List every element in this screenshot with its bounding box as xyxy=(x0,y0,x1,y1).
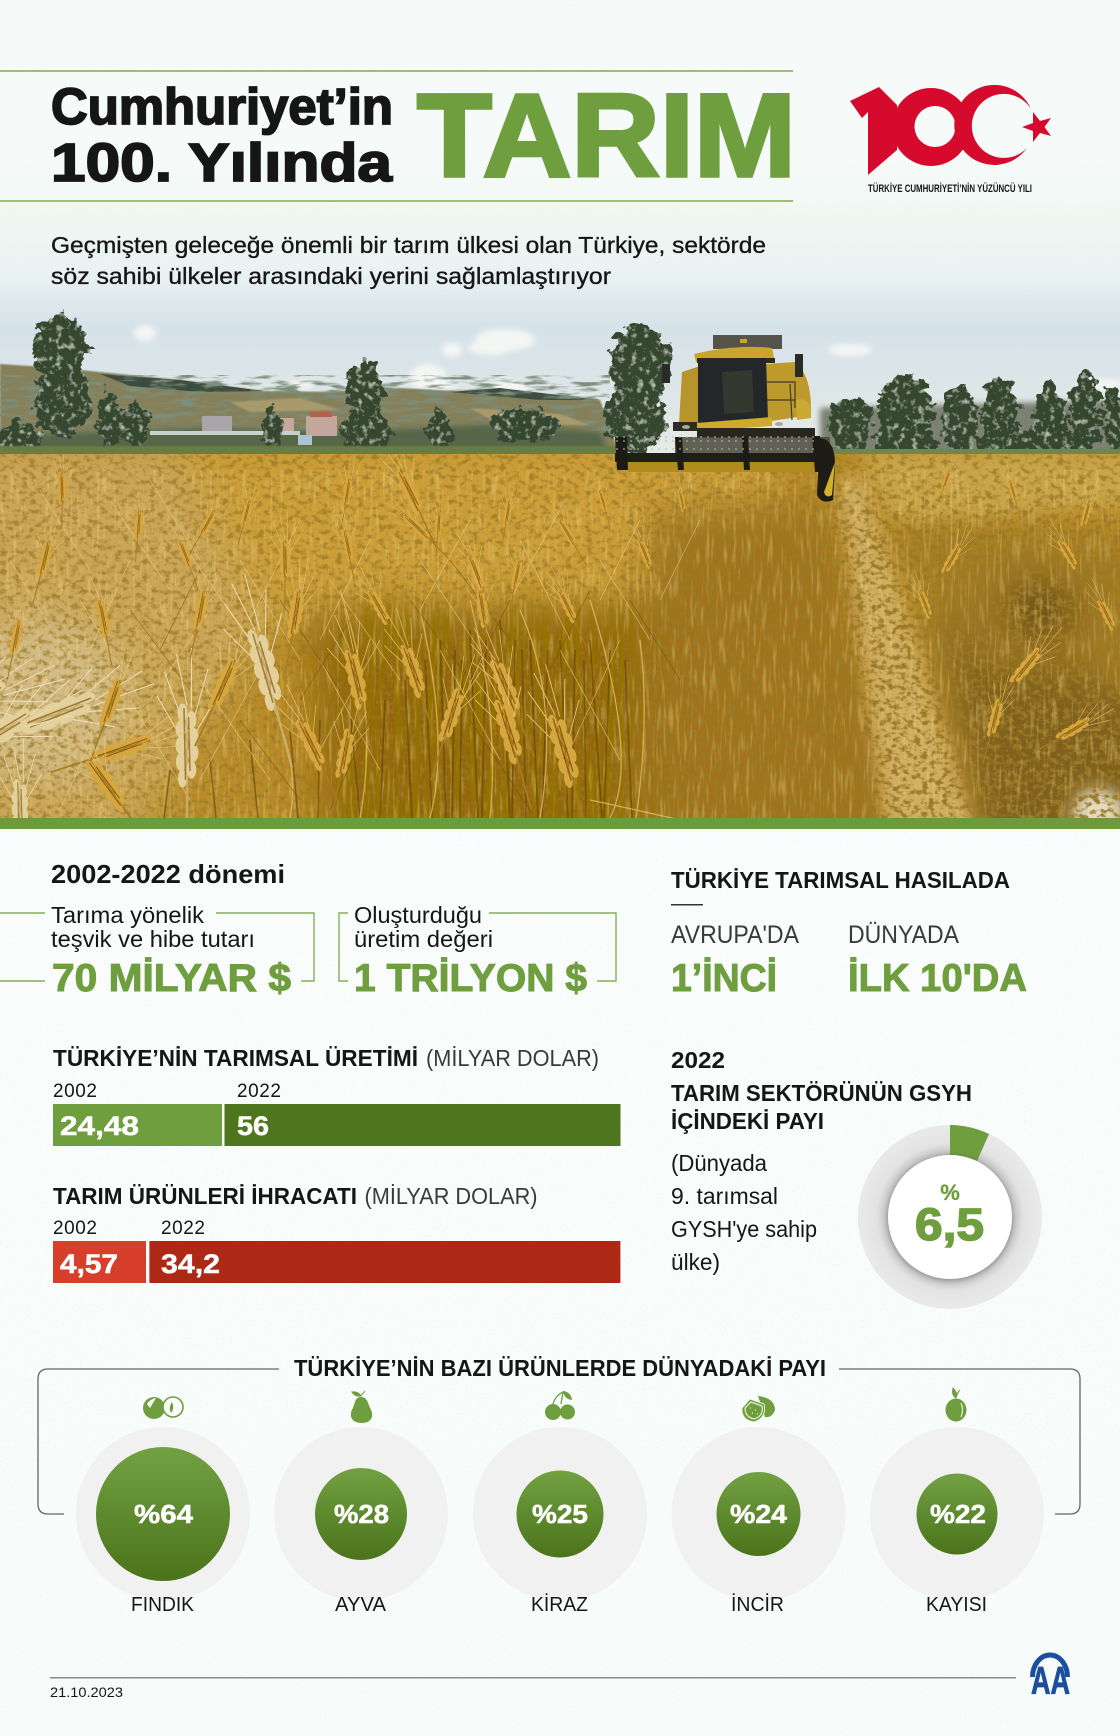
panel: tarımsal hasıla xyxy=(671,867,1027,1000)
panel: 2002-2022 dönemi: teşvik ve hibe tutarı xyxy=(51,926,255,952)
logo: Anadolu Ajansı: AA xyxy=(1031,1660,1070,1703)
item: fındık: FINDIK xyxy=(131,1594,195,1616)
field colour masses xyxy=(0,454,1120,818)
headlamps xyxy=(682,425,690,429)
heading: TARIM ÜRÜNLERİ İHRACATI xyxy=(53,1183,357,1209)
title: Cumhuriyet'in: Cumhuriyet’in xyxy=(51,78,393,135)
field base xyxy=(0,454,1120,818)
green divider bar xyxy=(0,818,1120,829)
item: kiraz: %25 xyxy=(532,1499,588,1529)
hills xyxy=(0,364,1120,456)
value: 70 milyar: 70 MİLYAR $ xyxy=(52,957,291,1000)
bar 2022 xyxy=(224,1104,620,1146)
item: kayısı: KAYISI xyxy=(926,1594,987,1616)
donut chart 6,5: 6,5 xyxy=(915,1199,984,1250)
item: kiraz: KİRAZ xyxy=(531,1593,588,1616)
header: title block xyxy=(0,70,796,202)
grass band xyxy=(0,446,620,455)
subtitle: Geçmişten geleceğe önemli bir tarım ülkesi olan Türkiye, sektörde xyxy=(51,232,766,258)
item: incir: %24 xyxy=(730,1499,788,1529)
donut chart 6,5: % xyxy=(940,1180,960,1205)
panel: GSYH payı: GYSH'ye sahip xyxy=(671,1216,817,1242)
windscreen xyxy=(698,358,768,425)
item: fındık: %64 xyxy=(134,1499,194,1529)
bar chart: tarımsal üretim: 56 xyxy=(237,1111,269,1141)
title: 100. Yılında: 100. Yılında xyxy=(51,133,393,193)
bracket xyxy=(38,1369,1080,1514)
bar chart: tarımsal üretim xyxy=(53,1045,620,1146)
heading: TÜRKİYE’NİN TARIMSAL ÜRETİMİ xyxy=(53,1045,418,1071)
bar chart: tarımsal üretim: 2022 xyxy=(237,1081,281,1102)
photo: wheat field and combine harvester xyxy=(0,296,1120,829)
item: ayva xyxy=(274,1391,448,1616)
label: üretim değeri: Oluşturduğu xyxy=(354,902,482,928)
icon: cherries xyxy=(545,1391,575,1420)
heading: 2002-2022 dönemi xyxy=(51,859,285,889)
wheat stalks xyxy=(164,620,632,818)
date: 21.10.2023 xyxy=(50,1684,123,1700)
header rails xyxy=(675,437,830,454)
logo: Anadolu Ajansı xyxy=(1031,1655,1070,1703)
panel: 2002-2022 dönemi: üretim değeri xyxy=(354,926,493,952)
footer xyxy=(50,1655,1070,1703)
panel: GSYH payı xyxy=(671,1047,1042,1309)
ladder xyxy=(767,382,795,420)
title rule bottom xyxy=(0,200,793,202)
panel: 2002-2022 dönemi xyxy=(0,859,616,1000)
heading: 2022 xyxy=(671,1047,725,1073)
mirrors xyxy=(662,364,670,383)
item: kiraz xyxy=(473,1391,647,1616)
bar 2002 xyxy=(53,1241,146,1283)
icon: fig xyxy=(742,1396,775,1422)
panel: tarımsal hasıla: İLK 10'DA xyxy=(848,957,1027,1000)
panel: ürünlerde dünyadaki pay xyxy=(38,1355,1080,1616)
yellow cab rim xyxy=(696,417,772,431)
bar chart: ihracat xyxy=(53,1183,620,1283)
fine awns xyxy=(10,480,700,810)
field xyxy=(0,454,1120,818)
item: ayva: %28 xyxy=(334,1499,389,1529)
bar chart: ihracat: 34,2 xyxy=(161,1249,220,1279)
bar chart: tarımsal üretim: (MİLYAR DOLAR) xyxy=(426,1045,599,1071)
bar chart: ihracat: (MİLYAR DOLAR) xyxy=(364,1183,538,1209)
value: 1 trilyon: 1 TRİLYON $ xyxy=(354,957,587,1000)
trees xyxy=(0,314,1120,456)
title rule top xyxy=(0,70,793,72)
logo: Türkiye Cumhuriyeti 100. yıl: TÜRKİYE CUMHURİYETİ’NİN YÜZÜNCÜ YILI xyxy=(868,182,1032,195)
Avrupa: AVRUPA'DA xyxy=(671,921,799,949)
panel: GSYH payı: TARIM SEKTÖRÜNÜN GSYH xyxy=(671,1080,972,1106)
note: (Dünyada xyxy=(671,1150,767,1176)
Dünya: DÜNYADA xyxy=(848,921,959,949)
bracket: üretim değeri xyxy=(339,913,616,981)
icon: apricot xyxy=(946,1388,966,1422)
panel: GSYH payı: İÇİNDEKİ PAYI xyxy=(671,1108,824,1134)
bar chart: ihracat: 2022 xyxy=(161,1218,205,1239)
buildings xyxy=(150,412,337,445)
title: TARIM: TARIM xyxy=(417,70,796,202)
side panels xyxy=(679,366,700,424)
heading: TÜRKİYE’NİN BAZI ÜRÜNLERDE DÜNYADAKİ PAYI xyxy=(294,1355,826,1381)
bracket: teşvik xyxy=(0,913,314,981)
heading: TÜRKİYE TARIMSAL HASILADA xyxy=(671,867,1010,893)
donut chart 6,5 xyxy=(858,1125,1042,1309)
panel: tarımsal hasıla: 1’İNCİ xyxy=(671,957,777,1000)
subtitle xyxy=(51,232,766,289)
item: ayva: AYVA xyxy=(335,1594,387,1616)
label: teşvik ve hibe: Tarıma yönelik xyxy=(51,902,205,928)
footer rule xyxy=(50,1677,1016,1678)
cab roof xyxy=(694,347,775,362)
field textures xyxy=(0,454,1120,818)
wheat ears: mid and far xyxy=(0,431,1120,768)
side tank xyxy=(796,399,811,420)
clouds xyxy=(134,325,1120,394)
years: 2002 xyxy=(53,1081,97,1102)
item: incir xyxy=(672,1396,846,1616)
item: kayısı: %22 xyxy=(930,1499,986,1529)
panel: GSYH payı: ülke) xyxy=(671,1249,720,1275)
side wheel and divider xyxy=(817,438,835,502)
subtitle: söz sahibi ülkeler arasındaki yerini sağlamlaştırıyor xyxy=(51,263,611,289)
item: fındık xyxy=(76,1397,250,1616)
bar 2002 xyxy=(53,1104,222,1146)
item: incir: İNCİR xyxy=(731,1593,784,1616)
wheat ears: near xyxy=(0,553,614,884)
years: 2002 xyxy=(53,1218,97,1239)
values: 4,57 xyxy=(60,1249,118,1279)
logo: Türkiye Cumhuriyeti 100. yıl xyxy=(850,85,1051,195)
icon: hazelnut xyxy=(143,1397,183,1419)
item: kayısı xyxy=(870,1388,1044,1616)
values: 24,48 xyxy=(60,1111,139,1141)
bar 2022 xyxy=(149,1241,620,1283)
combine harvester xyxy=(615,335,835,502)
icon: quince xyxy=(351,1391,372,1423)
grain tank xyxy=(713,335,782,349)
sky xyxy=(0,270,1120,460)
chassis xyxy=(673,422,697,431)
panel: GSYH payı: 9. tarımsal xyxy=(671,1183,778,1209)
